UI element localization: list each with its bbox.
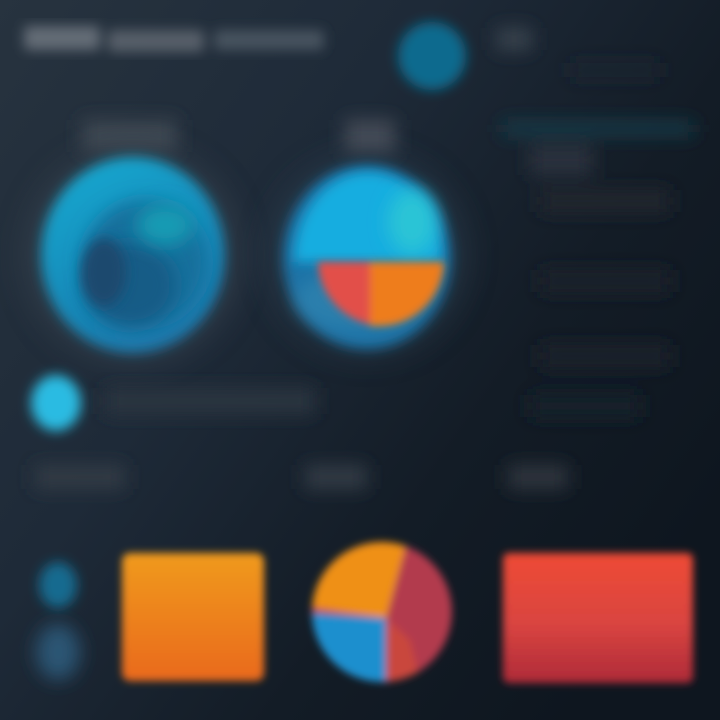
- icon: blue dot: [39, 562, 77, 608]
- icon: top badge circle: [398, 22, 466, 90]
- pie segment: red and orange: [318, 262, 444, 326]
- chart: red block: [503, 553, 693, 683]
- chart: bottom pie: [306, 536, 458, 688]
- panel: top right text column: [496, 28, 694, 417]
- heading: bottom left: [35, 465, 125, 489]
- chart: right pie gauge: [265, 153, 469, 357]
- heading: bottom centre: [305, 465, 367, 489]
- icon: small cyan circle: [31, 375, 81, 431]
- label above right chart: [345, 120, 395, 154]
- caption beside small circle: [105, 388, 315, 414]
- chart: left donut ring: [23, 145, 243, 365]
- chart: orange block: [122, 553, 264, 681]
- label above left ring: [82, 120, 177, 152]
- icon: dim blue dot: [36, 624, 80, 680]
- heading: bottom right: [508, 465, 568, 489]
- title bar: [24, 26, 324, 52]
